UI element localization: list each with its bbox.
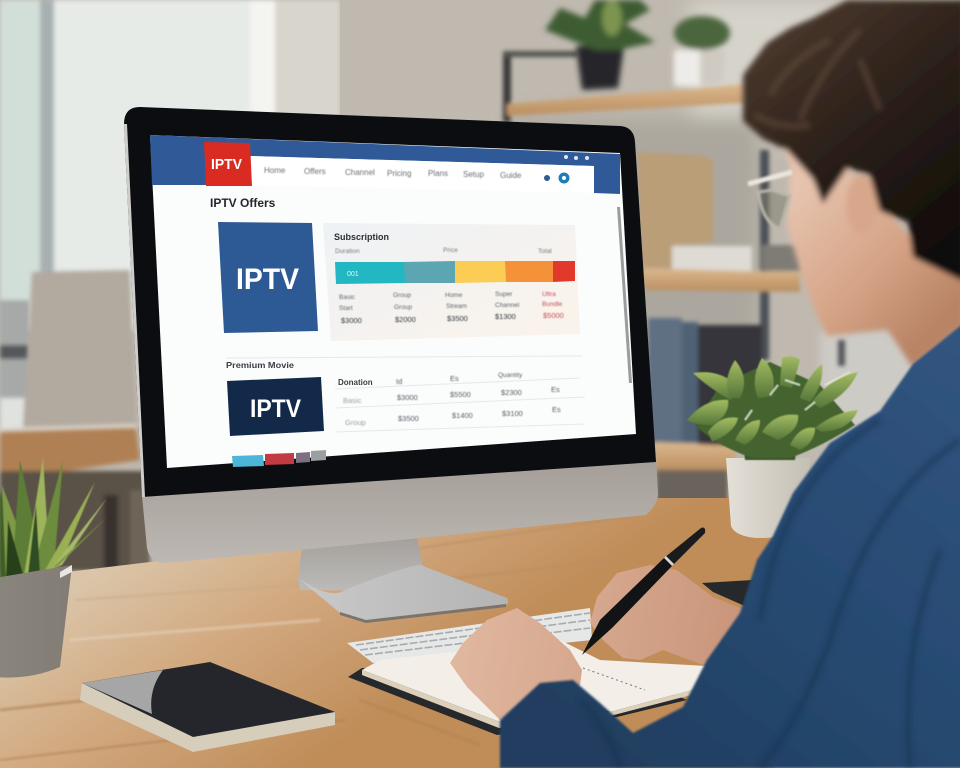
IPTV tile blue: IPTV	[236, 263, 299, 296]
hair	[743, 0, 960, 282]
subscription panel: Super	[495, 291, 513, 298]
open notebook	[348, 640, 707, 735]
left hand	[450, 608, 582, 720]
subscription panel: $1300	[495, 312, 516, 321]
glasses	[748, 172, 792, 229]
heading: IPTV Offers	[210, 196, 276, 210]
nav items: Plans	[428, 169, 448, 178]
subscription panel: Group	[394, 304, 412, 311]
pricing table	[226, 356, 585, 432]
pricing table: $3000	[397, 393, 418, 402]
pen	[582, 528, 705, 655]
face and neck	[780, 140, 960, 368]
desk grain	[0, 515, 700, 760]
colour bar: 001	[347, 271, 359, 278]
subscription panel: Channel	[495, 302, 520, 309]
nav items: Home	[264, 166, 286, 175]
subscription panel	[323, 223, 580, 341]
nav items: Setup	[463, 170, 484, 179]
monitor stand	[298, 536, 508, 623]
scrollbar	[617, 207, 632, 383]
IPTV logo tab: IPTV	[211, 156, 242, 173]
notebook on desk	[80, 662, 335, 752]
subscription panel: Group	[393, 292, 411, 299]
IPTV logo tab	[204, 142, 252, 186]
shelves and books	[503, 51, 845, 505]
keyboard	[347, 608, 592, 663]
left plant	[0, 457, 107, 678]
subscription panel: $3000	[341, 316, 362, 325]
IPTV tile navy	[227, 377, 324, 436]
monitor	[124, 107, 658, 563]
subscription panel: Stream	[446, 303, 467, 310]
subscription panel: Basic	[339, 294, 356, 301]
pricing table: Es	[551, 385, 560, 394]
subscription panel: Home	[445, 292, 463, 299]
nav items	[264, 166, 522, 180]
pricing table: Es	[450, 374, 459, 383]
person: jacket	[500, 322, 960, 768]
monitor bezel	[124, 107, 656, 497]
phone	[702, 580, 753, 607]
ear	[846, 175, 878, 235]
pricing table: Group	[345, 418, 366, 427]
IPTV tile blue	[218, 222, 318, 333]
subscription panel: Subscription	[334, 232, 389, 242]
subscription panel: $3500	[447, 314, 468, 323]
nav items: Offers	[304, 167, 326, 176]
pricing table: $3100	[502, 409, 523, 418]
pricing table: Es	[552, 405, 561, 414]
laptop in background	[0, 270, 136, 436]
window	[0, 0, 340, 432]
subscription panel: Bundle	[542, 301, 563, 308]
pricing table: $1400	[452, 411, 473, 420]
desk	[0, 498, 775, 768]
subscription panel: Ultra	[542, 291, 556, 298]
pricing table: $5500	[450, 390, 471, 399]
pricing table: Quantity	[498, 372, 523, 379]
subscription panel: Price	[443, 247, 458, 254]
colour tabs	[232, 450, 326, 467]
colour bar	[335, 261, 575, 284]
IPTV tile navy: IPTV	[250, 395, 301, 423]
back side table	[0, 428, 150, 571]
subscription panel: Total	[538, 248, 552, 255]
pricing table: $2300	[501, 388, 522, 397]
nav items: Guide	[500, 171, 522, 180]
shelf plants	[545, 0, 730, 90]
pricing table: Id	[396, 377, 402, 386]
pricing table: $3500	[398, 414, 419, 423]
pricing table: Donation	[338, 378, 373, 387]
subscription panel: Start	[339, 305, 353, 312]
subscription panel: $5000	[543, 311, 564, 320]
monitor chin	[142, 460, 658, 563]
person: head	[743, 0, 960, 368]
header band	[150, 135, 620, 194]
second section heading: Premium Movie	[226, 360, 294, 370]
nav items: Pricing	[387, 169, 411, 178]
right hand	[590, 565, 745, 665]
screen	[150, 135, 636, 468]
nav items: Channel	[345, 168, 375, 177]
subscription panel: Duration	[335, 248, 360, 255]
pricing table: Basic	[343, 396, 362, 405]
jacket folds	[580, 420, 960, 768]
subscription panel: $2000	[395, 315, 416, 324]
right plant	[687, 356, 858, 538]
